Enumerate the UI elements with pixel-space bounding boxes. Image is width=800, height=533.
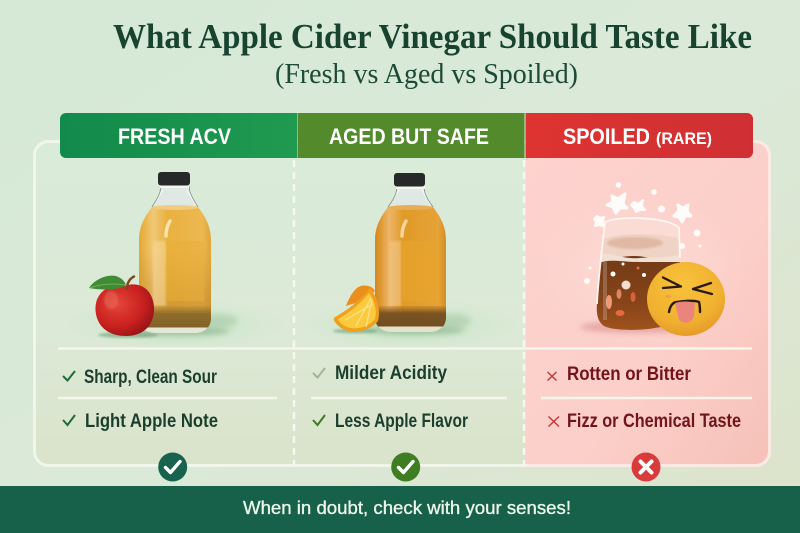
illustration: fresh bottle with apple (89, 172, 238, 338)
header: spoiled: SPOILED (563, 124, 650, 149)
list: fresh acv: Light Apple Note (85, 410, 218, 432)
header: fresh acv: FRESH ACV (118, 124, 231, 149)
list: aged but safe: Milder Acidity (335, 362, 447, 384)
header: aged but safe (298, 113, 524, 158)
header: aged but safe: AGED BUT SAFE (329, 124, 489, 149)
list: spoiled: Fizz or Chemical Taste (567, 410, 741, 432)
list: spoiled: Rotten or Bitter (567, 363, 691, 385)
footer banner (0, 486, 800, 533)
icon: red cross badge (632, 452, 660, 482)
fizz stars (584, 182, 702, 284)
icon: olive check badge (391, 452, 420, 482)
illustration: aged bottle with lemon (333, 173, 471, 337)
face emoji (647, 262, 725, 336)
title: What Apple Cider Vinegar Should Taste Like (113, 18, 752, 56)
subtitle: (Fresh vs Aged vs Spoiled) (275, 59, 578, 90)
footer banner: When in doubt, check with your senses! (243, 497, 571, 518)
list: fresh acv (63, 366, 218, 432)
drink glass (596, 217, 681, 330)
list: aged but safe (313, 362, 468, 432)
lemon wedge (333, 286, 379, 334)
icon: green check badge (158, 452, 187, 482)
apple (89, 276, 158, 338)
list: spoiled (548, 363, 741, 432)
list: fresh acv: Sharp, Clean Sour (84, 366, 217, 388)
illustration: spoiled drink with face (580, 182, 725, 336)
header: spoiled (526, 113, 753, 158)
panel: comparison table (34, 142, 770, 466)
header: fresh acv (60, 113, 297, 158)
list: aged but safe: Less Apple Flavor (335, 410, 468, 432)
header: spoiled: (RARE) (656, 129, 712, 148)
